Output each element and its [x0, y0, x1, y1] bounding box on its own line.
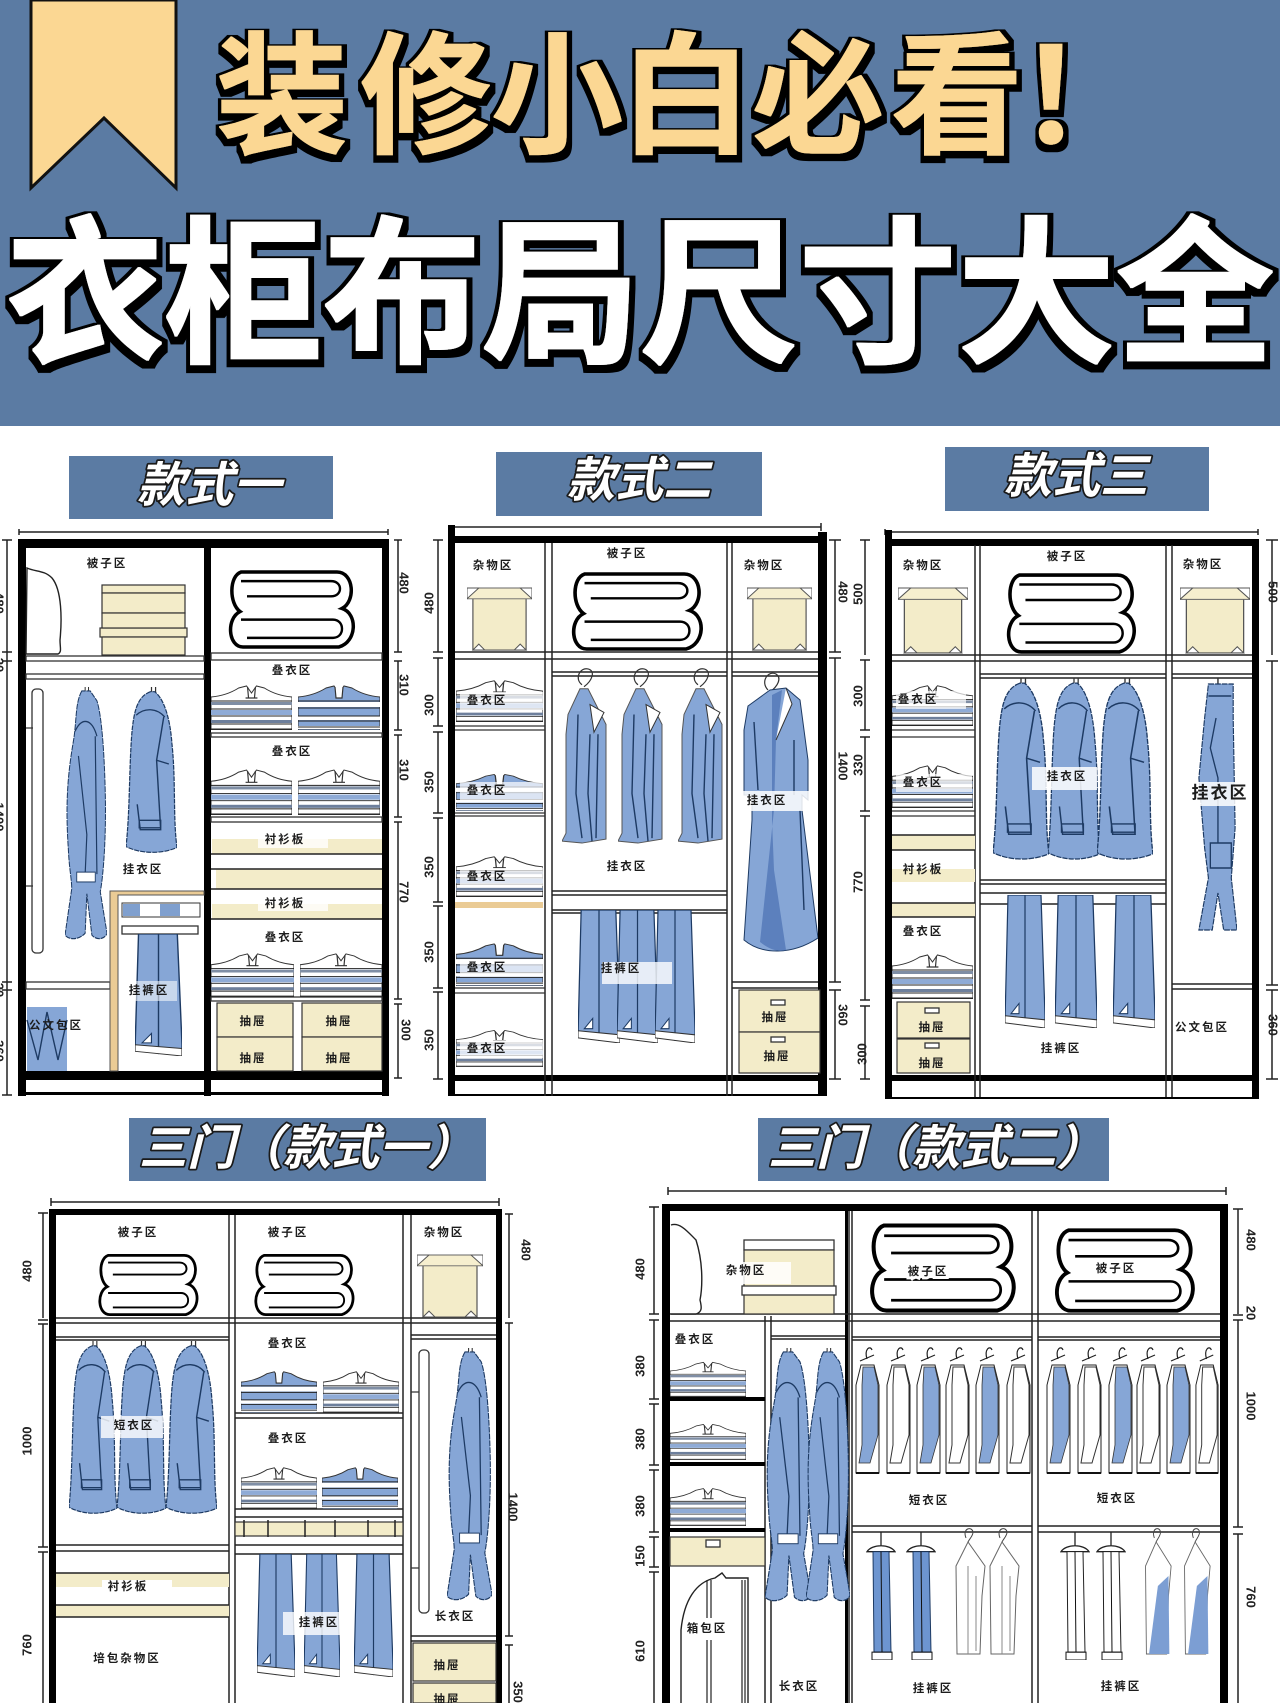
hanging clothes: [26, 682, 177, 953]
zone labels: 叠衣区: [467, 783, 507, 797]
zone labels: 挂衣区: [123, 862, 163, 876]
zone labels: 挂裤区: [1101, 1679, 1141, 1693]
dimension numbers: 350: [422, 1029, 436, 1051]
storage boxes and blanket: [898, 575, 1250, 653]
dimension numbers: 500: [850, 583, 866, 605]
panel: style one: [0, 456, 414, 1096]
heading: style one: [69, 456, 333, 519]
dimension numbers: 300: [854, 1043, 870, 1065]
zone labels: 被子区: [607, 546, 647, 560]
title line two: 衣柜布局尺寸大全: [6, 208, 1274, 384]
dimension numbers: [20, 1239, 534, 1703]
zone labels: 被子区: [87, 556, 127, 570]
zone labels: 挂裤区: [601, 961, 641, 975]
zone labels: 被子区: [1047, 549, 1087, 563]
folded shirts and drawer: [670, 1362, 765, 1566]
zone labels: 挂裤区: [913, 1681, 953, 1695]
drawers: [739, 990, 820, 1073]
zone labels: 叠衣区: [467, 693, 507, 707]
dimension numbers: 1000: [20, 1427, 34, 1455]
zone labels: 抽屉: [326, 1051, 352, 1065]
zone labels: 叠衣区: [467, 869, 507, 883]
zone labels: 挂衣区: [1047, 769, 1087, 783]
zone labels: 公文包区: [1175, 1020, 1229, 1034]
zone labels: 叠衣区: [903, 924, 943, 938]
zone labels: 杂物区: [473, 558, 513, 572]
zone labels: [29, 556, 352, 1065]
zone labels: 抽屉: [240, 1014, 266, 1028]
zone labels: 挂裤区: [129, 983, 169, 997]
zone labels: 长衣区: [779, 1679, 819, 1693]
wardrobe structure: [860, 529, 1278, 1099]
dimension numbers: 480: [632, 1258, 648, 1280]
dimension numbers: 310: [396, 674, 412, 696]
zone labels: 叠衣区: [675, 1332, 715, 1346]
dimension numbers: 480: [20, 1260, 34, 1282]
folded shirts and boards: [211, 686, 382, 1001]
zone labels: 被子区: [1096, 1261, 1136, 1275]
zone labels: 杂物区: [903, 558, 943, 572]
drawers: [413, 1643, 496, 1703]
dimension numbers: 310: [396, 759, 412, 781]
zone labels: 叠衣区: [467, 1041, 507, 1055]
dimension numbers: 480: [422, 592, 436, 614]
dimension numbers: 760: [20, 1634, 34, 1656]
zone labels: 衬衫板: [108, 1579, 148, 1593]
zone labels: 挂裤区: [1041, 1041, 1081, 1055]
zone labels: 叠衣区: [272, 663, 312, 677]
dimension numbers: 300: [422, 694, 436, 716]
zone labels: 叠衣区: [265, 930, 305, 944]
dimension numbers: 300: [850, 685, 866, 707]
dimension numbers: 1000: [1244, 1392, 1258, 1420]
zone labels: 被子区: [118, 1225, 158, 1239]
panel: three doors style one: [20, 1118, 534, 1703]
zone labels: 短衣区: [114, 1418, 154, 1432]
dimension numbers: [422, 581, 850, 1051]
dimension numbers: 20: [1244, 1306, 1258, 1320]
zone labels: 挂衣区: [747, 793, 787, 807]
heading: three doors style two: 三门（款式二）: [768, 1122, 1104, 1176]
zone labels: 抽屉: [434, 1658, 460, 1672]
zone labels: 衬衫板: [903, 862, 943, 876]
dimension numbers: 480: [836, 581, 850, 603]
dimension numbers: 350: [422, 941, 436, 963]
dimension numbers: 350: [422, 771, 436, 793]
dimension numbers: 760: [1244, 1586, 1258, 1608]
zone labels: 抽屉: [240, 1051, 266, 1065]
zone labels: 长衣区: [435, 1609, 475, 1623]
wardrobe structure: [38, 1198, 513, 1703]
panel: style two: [422, 452, 850, 1096]
zone labels: 杂物区: [424, 1225, 464, 1239]
zone labels: 抽屉: [326, 1014, 352, 1028]
zone labels: 叠衣区: [898, 692, 938, 706]
hanging clothes: [993, 668, 1237, 1028]
wardrobe structure: [649, 1187, 1243, 1703]
dimension numbers: 300: [398, 1019, 414, 1041]
dimension numbers: 380: [632, 1495, 648, 1517]
hanging clothes: [765, 1343, 1218, 1660]
pants compartment: [27, 891, 204, 1071]
title line one: 装修小白必看！: [216, 24, 1150, 171]
zone labels: 杂物区: [744, 558, 784, 572]
heading: style three: 款式三: [1004, 450, 1152, 504]
dimension numbers: 480: [1244, 1229, 1258, 1251]
panel: style three: [850, 447, 1280, 1099]
folded shirts: [56, 1372, 403, 1617]
zone labels: 被子区: [908, 1264, 948, 1278]
top shelf items: [100, 1255, 483, 1317]
dimension numbers: 1400: [836, 752, 850, 780]
zone labels: 挂衣区: [607, 859, 647, 873]
zone labels: 抽屉: [762, 1010, 788, 1024]
heading: style two: [496, 452, 762, 516]
heading: style one: 款式一: [137, 460, 285, 512]
zone labels: 公文包区: [29, 1018, 83, 1032]
hanging clothes: [562, 669, 818, 1043]
zone labels: 箱包区: [687, 1621, 727, 1635]
zone labels: 短衣区: [909, 1493, 949, 1507]
dimension numbers: 360: [836, 1004, 850, 1026]
dimension numbers: 350: [510, 1681, 526, 1703]
zone labels: 杂物区: [726, 1263, 766, 1277]
dimension numbers: 380: [632, 1428, 648, 1450]
zone labels: 抽屉: [918, 1056, 946, 1070]
panel: three doors style two: [632, 1118, 1258, 1703]
zone labels: [93, 1225, 475, 1703]
zone labels: 叠衣区: [272, 744, 312, 758]
zone labels: 叠衣区: [467, 960, 507, 974]
hanging clothes: [69, 1338, 492, 1677]
dimension numbers: 770: [396, 881, 412, 903]
storage boxes and blanket: [467, 574, 812, 650]
dimension numbers: [850, 581, 1280, 1065]
icon: garment bag: [681, 1573, 748, 1703]
folded shirts: [456, 681, 543, 1067]
zone labels: [675, 1261, 1141, 1695]
top shelf items: [26, 568, 353, 655]
dimension numbers: 610: [632, 1640, 648, 1662]
zone labels: 衬衫板: [265, 832, 305, 846]
zone labels: 杂物区: [1183, 557, 1223, 571]
heading: three doors style one: 三门（款式一）: [139, 1122, 475, 1176]
dimension numbers: [632, 1229, 1258, 1662]
zone labels: 被子区: [268, 1225, 308, 1239]
heading: style two: 款式二: [567, 454, 714, 508]
dimension numbers: 480: [518, 1239, 534, 1261]
dimension numbers: [0, 572, 414, 1062]
zone labels: 抽屉: [918, 1020, 946, 1034]
zone labels: 抽屉: [764, 1049, 790, 1063]
dimension numbers: 1400: [506, 1493, 520, 1521]
wardrobe structure: [433, 523, 841, 1096]
header banner: [0, 0, 1280, 426]
dimension numbers: 480: [396, 572, 412, 594]
zone labels: [460, 546, 818, 1063]
dimension numbers: 150: [632, 1545, 648, 1567]
zone labels: 短衣区: [1097, 1491, 1137, 1505]
dimension numbers: 770: [850, 871, 866, 893]
heading: style three: [945, 447, 1209, 511]
zone labels: [896, 549, 1252, 1070]
zone labels: 挂衣区: [1192, 782, 1248, 802]
wardrobe structure: [2, 529, 402, 1096]
zone labels: 培包杂物区: [93, 1651, 161, 1665]
dimension numbers: 380: [632, 1355, 648, 1377]
zone labels: 叠衣区: [268, 1431, 308, 1445]
dimension numbers: 350: [422, 856, 436, 878]
top shelf items: [671, 1224, 1193, 1314]
drawers: [897, 1002, 970, 1073]
dimension numbers: 330: [850, 754, 866, 776]
zone labels: 衬衫板: [265, 896, 305, 910]
zone labels: 挂裤区: [299, 1615, 339, 1629]
folded shirts and boards: [892, 686, 975, 999]
zone labels: 叠衣区: [268, 1336, 308, 1350]
icon: bookmark: [31, 0, 176, 188]
zone labels: 叠衣区: [903, 775, 943, 789]
drawers: [217, 1003, 382, 1071]
